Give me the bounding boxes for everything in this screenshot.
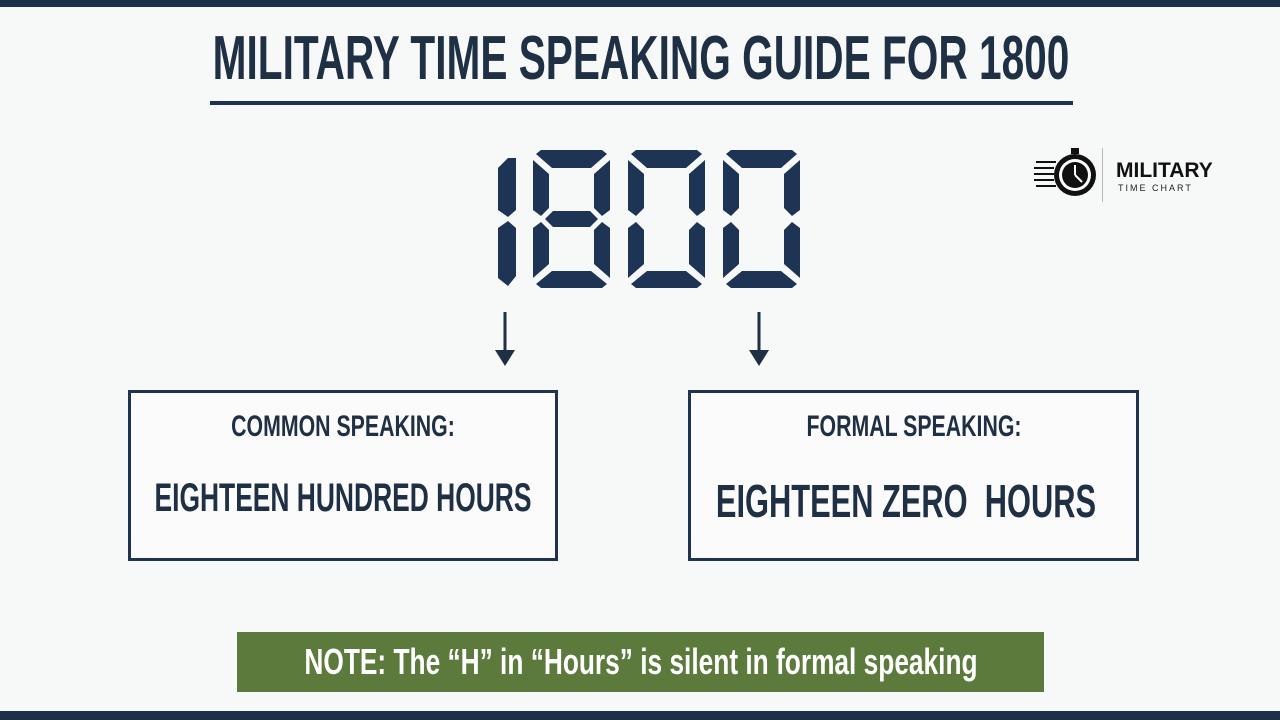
note banner <box>237 632 1044 692</box>
logo text: MILITARY <box>1116 159 1213 182</box>
title: MILITARY TIME SPEAKING GUIDE FOR 1800 <box>213 24 1069 93</box>
panel: formal speaking: FORMAL SPEAKING: <box>806 410 1021 443</box>
arrow right <box>749 312 769 366</box>
arrow left <box>495 312 515 366</box>
panel: common speaking <box>128 390 558 561</box>
logo <box>1034 148 1213 202</box>
panel: formal speaking <box>688 390 1139 561</box>
panel: formal speaking: EIGHTEEN ZERO HOURS <box>715 475 1096 527</box>
panel: common speaking: EIGHTEEN HUNDRED HOURS <box>155 476 531 520</box>
note banner: NOTE: The “H” in “Hours” is silent in formal speaking <box>304 641 977 682</box>
panel: common speaking: COMMON SPEAKING: <box>231 410 455 443</box>
icon: stopwatch <box>1034 148 1096 196</box>
logo: TIME CHART <box>1118 183 1193 193</box>
